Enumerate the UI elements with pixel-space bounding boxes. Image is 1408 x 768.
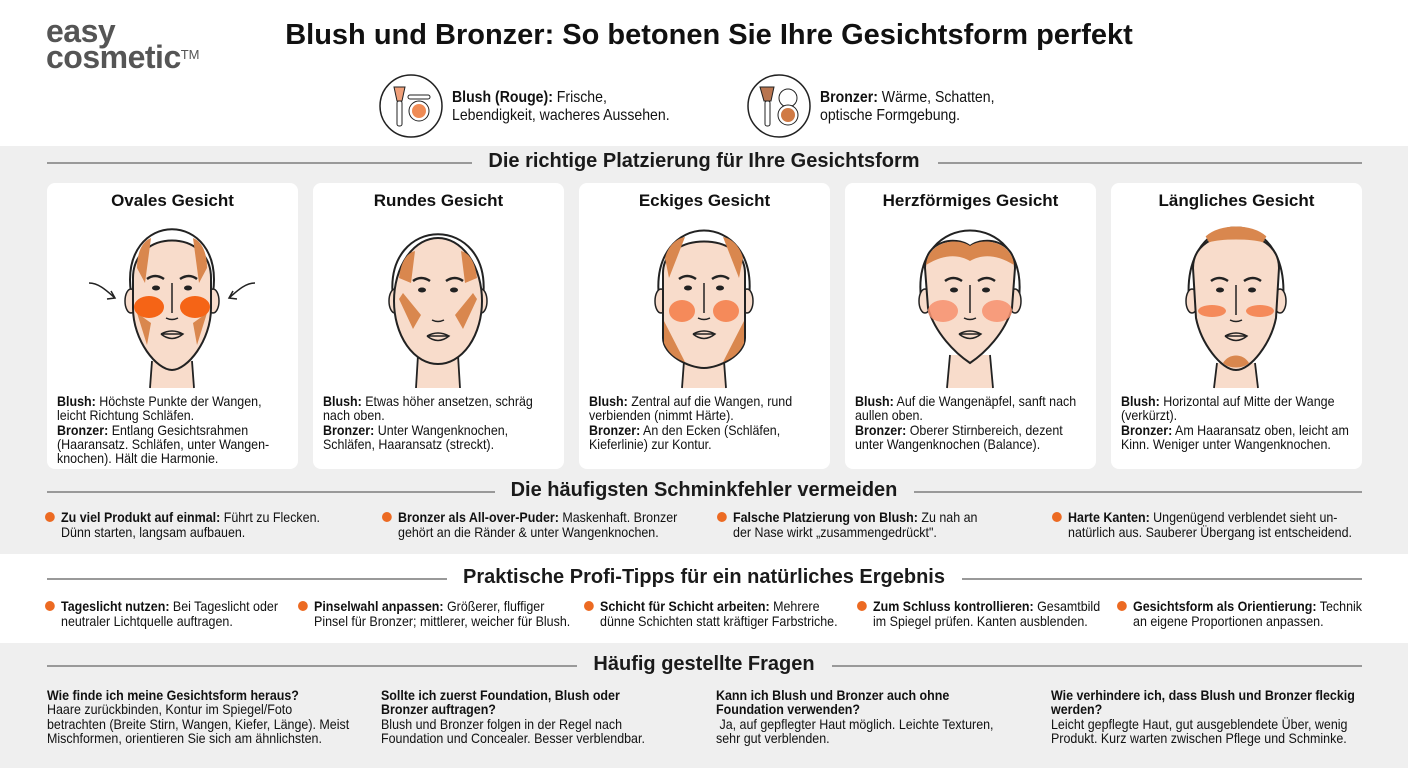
faq 2: Foundation und Concealer. Besser verblendbar. [381,730,645,746]
faq 4: Produkt. Kurz warten zwischen Pflege und Schminke. [1051,730,1347,746]
card: round: Rundes Gesicht [374,191,503,210]
card: heart: Herzförmiges Gesicht [883,191,1058,210]
mistake 1: Zu viel Produkt auf einmal: Führt zu Flecken. [61,509,320,525]
tip 1: Tageslicht nutzen: Bei Tageslicht oder [61,598,278,614]
mistake 2: gehört an die Ränder & unter Wangenknochen. [398,524,659,540]
mistake 4: natürlich aus. Sauberer Übergang ist entscheidend. [1068,524,1352,540]
faq 3: Ja, auf gepflegter Haut möglich. Leichte Texturen, [719,716,994,732]
faq 3: Kann ich Blush und Bronzer auch ohne [716,687,949,703]
mistake 1 [45,510,383,539]
card: long: Kinn. Weniger unter Wangenknochen. [1121,436,1331,452]
card: round: Bronzer: Unter Wangenknochen, [323,422,508,438]
tip 2: Pinsel für Bronzer; mittlerer, weicher für Blush. [314,612,570,628]
text: bronzer definition [820,89,994,124]
text: blush definition [452,89,670,124]
card: round: Blush: Etwas höher ansetzen, schräg [323,393,533,409]
text: bronzer definition: optische Formgebung. [820,107,960,124]
face: round [388,233,488,388]
background band: placement section [0,146,1408,554]
logo: cosmeticTM [46,39,200,75]
faq 1 [47,687,350,746]
faq 4: Wie verhindere ich, dass Blush und Bronzer fleckig [1051,687,1355,703]
card: oval: leicht Richtung Schläfen. [57,407,194,423]
card: square: Bronzer: An den Ecken (Schläfen, [589,422,780,438]
text: blush definition: Lebendigkeit, wacheres Aussehen. [452,107,670,124]
faq 3 [716,687,994,746]
logo: easy [46,13,115,49]
faq 2: Blush und Bronzer folgen in der Regel nach [381,716,622,732]
mistake 3: Falsche Platzierung von Blush: Zu nah an [733,509,977,525]
mistake 2: Bronzer als All-over-Puder: Maskenhaft. Bronzer [398,509,677,525]
card: heart [845,183,1096,469]
face: heart [918,230,1022,388]
faq 4 [1051,687,1355,746]
faq 3: Foundation verwenden? [716,701,860,717]
card: oval [47,183,298,469]
card: heart: unter Wangenknochen (Balance). [855,436,1040,452]
tip 2: Pinselwahl anpassen: Größerer, fluffiger [314,598,544,614]
card: round: nach oben. [323,407,385,423]
faq 4: Leicht gepflegte Haut, gut ausgeblendete Über, wenig [1051,716,1347,732]
faq 2 [381,687,645,746]
tip 4: im Spiegel prüfen. Kanten ausblenden. [873,612,1088,628]
tip 4: Zum Schluss kontrollieren: Gesamtbild [873,598,1100,614]
faq 1: Mischformen, orientieren Sie sich am ähnlichsten. [47,730,322,746]
card: oval: Blush: Höchste Punkte der Wangen, [57,393,262,409]
mistake 3: der Nase wirkt „zusammengedrückt". [733,524,937,540]
card: oval: Bronzer: Entlang Gesichtsrahmen [57,422,248,438]
card: oval: Ovales Gesicht [111,191,234,210]
tip 3 [584,599,869,628]
tip 5: Gesichtsform als Orientierung: Technik [1133,598,1362,614]
card: long [1111,183,1362,469]
card: long: Blush: Horizontal auf Mitte der Wange [1121,393,1335,409]
card: long: (verkürzt). [1121,407,1177,423]
card: round [313,183,564,469]
card: heart: aullen oben. [855,407,923,423]
card: square [579,183,830,469]
mistake 4 [1052,510,1390,539]
card: square: verbienden (nimmt Härte). [589,407,734,423]
faq 2: Bronzer auftragen? [381,701,496,717]
tip 5: an eigene Proportionen anpassen. [1133,612,1324,628]
card: round: Schläfen, Haaransatz (streckt). [323,436,494,452]
heading: tips: Praktische Profi-Tipps für ein natürliches Ergebnis [463,566,945,588]
heading: mistakes: Die häufigsten Schminkfehler vermeiden [511,479,897,501]
icon: bronzer brush and compact [747,74,811,138]
card: heart: Bronzer: Oberer Stirnbereich, dezent [855,422,1063,438]
card: oval: knochen). Hält die Harmonie. [57,450,218,466]
faq 3: sehr gut verblenden. [716,730,830,746]
icon: blush brush and compact [379,74,443,138]
faq 1: Wie finde ich meine Gesichtsform heraus? [47,687,299,703]
text: bronzer definition: Bronzer: Wärme, Schatten, [820,89,994,106]
card: long: Bronzer: Am Haaransatz oben, leicht am [1121,422,1349,438]
tip items [45,598,1362,629]
title: Blush und Bronzer: So betonen Sie Ihre Gesichtsform perfekt [285,19,1133,51]
faq 1: Haare zurückbinden, Kontur im Spiegel/Foto [47,701,292,717]
card: heart: Blush: Auf die Wangenäpfel, sanft nach [855,393,1076,409]
text: blush definition: Blush (Rouge): Frische, [452,89,607,106]
heading: faq: Häufig gestellte Fragen [593,653,815,675]
tip 4 [857,599,1133,628]
tip 3: dünne Schichten statt kräftiger Farbstriche. [600,612,838,628]
mistake 3 [717,510,1055,539]
face: long [1185,226,1287,388]
faq 1: betrachten (Breite Stirn, Wangen, Kiefer, Länge). Meist [47,716,349,732]
tip 2 [298,599,601,628]
face: square [654,230,754,388]
tip 1 [45,599,321,628]
mistake items [45,509,1352,540]
faq 4: werden? [1051,701,1102,717]
card: square: Eckiges Gesicht [639,191,770,210]
tip 5 [1117,599,1393,628]
card: square: Kieferlinie) zur Kontur. [589,436,712,452]
mistake 4: Harte Kanten: Ungenügend verblendet sieht un- [1068,509,1337,525]
heading: placement: Die richtige Platzierung für Ihre Gesichtsform [488,150,920,172]
tip 3: Schicht für Schicht arbeiten: Mehrere [600,598,820,614]
card: long: Längliches Gesicht [1159,191,1314,210]
logo [46,13,200,75]
background band: faq section [0,643,1408,768]
mistake 2 [382,510,720,539]
tip 1: neutraler Lichtquelle auftragen. [61,612,233,628]
mistake 1: Dünn starten, langsam aufbauen. [61,524,245,540]
face: oval [89,228,255,388]
card: square: Blush: Zentral auf die Wangen, rund [589,393,792,409]
faq 2: Sollte ich zuerst Foundation, Blush oder [381,687,620,703]
card: oval: (Haaransatz. Schläfen, unter Wangen- [57,436,269,452]
